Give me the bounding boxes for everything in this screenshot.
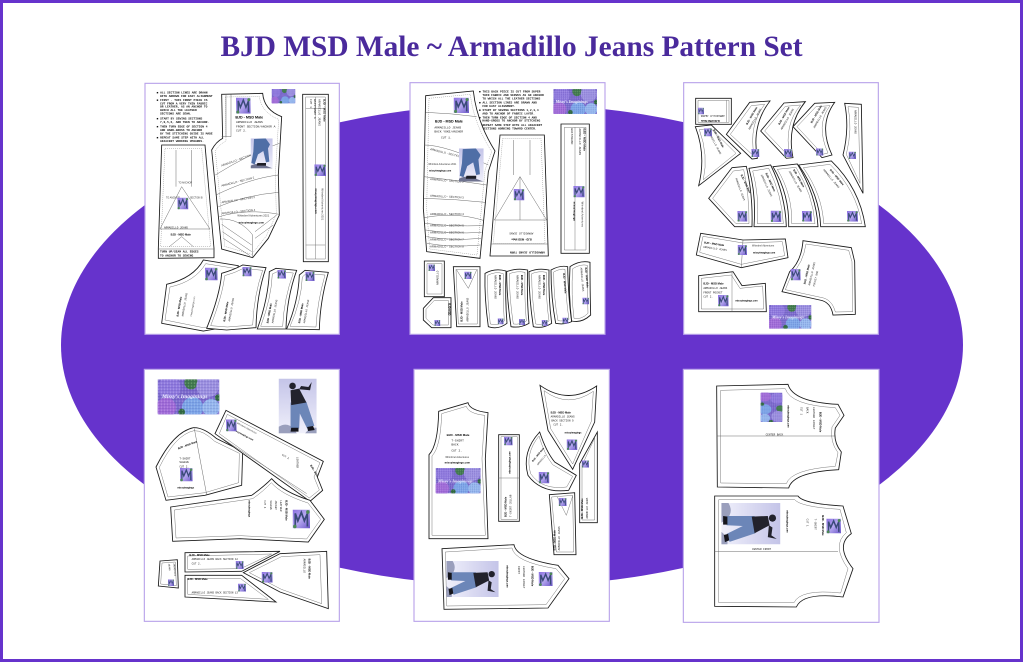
piece: back yoke: ARMADILLO - SECTION 7 <box>430 237 464 241</box>
piece: front leg: SECTION B <box>190 197 203 199</box>
piece: back yoke: ARMADILLO - SECTION 4 <box>430 212 464 216</box>
piece: lower sections row: ARMADILLO JEANS <box>271 299 279 324</box>
piece: t-shirt back <box>429 403 488 539</box>
piece: t-shirt back: BACK <box>451 443 459 446</box>
instruction notes <box>479 91 544 130</box>
pieces: chevron sections lower row: BJD - MSD Male <box>792 168 806 188</box>
panel: jeans front pattern sheet <box>145 83 339 334</box>
piece: back leg: ARMADILLO JEANS <box>509 231 533 234</box>
pieces: chevron sections upper row: ARMADILLO JEANS <box>813 106 828 129</box>
piece: front pocket: FRONT POCKET <box>703 291 723 294</box>
piece: jacket collar strip: CUT 2 <box>281 454 290 460</box>
piece: strip: BJD - MSD Male <box>580 498 584 519</box>
piece: lower sections row: ARMADILLO JEANS <box>228 297 235 322</box>
instruction notes: WHICH ALL THE LEATHER <box>160 109 197 112</box>
piece: jacket back <box>717 384 844 488</box>
piece: back leg: BJD - MSD Male <box>511 237 532 241</box>
instruction notes: 7,8,5,6, AND THEN TO ANCHOR. <box>160 121 209 124</box>
piece: front yoke: ARMADILLO - SECTION 3 <box>221 195 256 204</box>
piece: t-shirt back: BJD - MSD Male <box>447 433 470 437</box>
piece: back yoke: ARMADILLO - SECTION 8 <box>430 244 464 248</box>
piece: lower sections row: BJD - MSD Male <box>265 302 273 324</box>
panel: t-shirt and jacket sleeve sheet <box>144 369 339 621</box>
piece: small rectangle: ARMADILLO JEANS <box>700 114 725 117</box>
instruction notes: HAND-GROSS TO ANCHOR BY STITCHING <box>482 120 540 123</box>
piece: jacket yoke: BJD - MSD Male <box>551 411 571 415</box>
piece: lower sections row: missyimagings.com <box>191 296 196 317</box>
icon: hydrangea tile <box>573 186 585 197</box>
piece: back yoke strip: missyimagings.com <box>753 252 775 254</box>
instruction notes: ■ ALL SECTION LINES ARE DRAWN AND <box>479 102 537 105</box>
pieces: back sections: ARMADILLO JEANS BACK SECTION 13 <box>192 591 238 594</box>
piece: t-shirt back: Whimbrel Adventures <box>445 456 470 459</box>
instruction notes: OR LEATHER, AS AN ANCHOR TO <box>160 106 208 109</box>
instruction notes: FOR EASY ALIGNMENT. <box>482 105 516 108</box>
panel: t-shirt and vest pattern sheet <box>414 369 609 621</box>
logo banner <box>552 86 599 117</box>
piece: front yoke: ARMADILLO - SECTION 2 <box>221 175 255 188</box>
piece: back yoke: BJD - MSD Male <box>435 119 463 123</box>
piece: fly strip: BJD - MSD Male <box>322 99 326 122</box>
piece: t-shirt back: Missy's Imaginings <box>437 478 473 483</box>
piece: small parts row: ARMADILLO JEANS <box>579 267 584 292</box>
instruction notes: ■ REPEAT SAME STEP WITH ALL ADJACENT <box>479 124 542 127</box>
piece: jacket collar strip: BJD - MSD <box>309 464 319 478</box>
piece: back yoke: Whimbrel Adventures 2021 <box>428 163 457 166</box>
piece: jacket back: missyimagings.com <box>786 405 788 428</box>
piece: front leg: TURN UP/SEAM ALL EDGES <box>160 249 199 253</box>
logo banner <box>434 465 482 496</box>
instruction notes: ■ THIS BACK PIECE IS CUT FROM SUPER <box>479 91 541 94</box>
piece: collar <box>499 435 519 521</box>
piece: lower sections row: BJD - MSD Male <box>222 301 230 322</box>
pieces: back sections: ARMADILLO <box>302 559 305 573</box>
instruction notes: SECTIONS ARE SEWN. <box>160 112 192 115</box>
piece: rectangle section: ARMADILLO JEANS <box>558 526 561 550</box>
piece: leather jacket front: missyimagings.com <box>505 565 507 588</box>
piece: pocket bag: BJD - MSD Male <box>802 263 811 285</box>
piece: jacket back: CENTER BACK <box>766 433 784 436</box>
piece: small tag: JEANS <box>167 563 171 571</box>
piece: back leg <box>490 135 548 256</box>
piece: fly strip <box>303 94 328 262</box>
piece: jacket yoke: ARMADILLO JEANS <box>551 416 575 419</box>
pieces: chevron sections upper row: ARMADILLO JEANS <box>854 110 857 134</box>
piece: back yoke: ARMADILLO JEANS <box>434 126 461 129</box>
piece: fly strip: CUT 1 <box>309 99 312 108</box>
logo banner <box>271 87 296 105</box>
piece: strip: ARMADILLO JEANS <box>586 497 589 519</box>
piece: jacket front: BJD - MSD Male <box>821 515 825 536</box>
piece: jacket front: CUT 1 <box>805 519 808 527</box>
piece: jacket sleeve: missyimagings <box>247 500 249 518</box>
logo banner: Missy's Imaginings <box>771 314 804 319</box>
piece: small rectangle: BJD-MSD Male <box>700 119 720 123</box>
pieces: chevron sections lower row: BJD - MSD Male <box>740 174 752 194</box>
instruction notes: AND TO ANCHOR OF FABRIC LAYER. <box>482 112 535 115</box>
piece: t-shirt sleeve: CUT 2. <box>179 465 189 468</box>
piece: back yoke strip <box>696 233 788 268</box>
piece: lower sections row: ARMADILLO JEANS <box>181 292 189 317</box>
piece: small tag <box>158 560 178 588</box>
piece: back leg: ARMADILLO JEANS TURN <box>510 251 545 254</box>
instruction notes: BY THE STITCHING GUIDE IS MADE <box>160 132 213 135</box>
piece: jacket collar strip <box>215 410 323 501</box>
piece: front leg <box>158 145 214 258</box>
piece: jacket yoke <box>540 385 597 469</box>
instruction notes: ■ ALL SECTION LINES ARE DRAWN <box>157 92 208 95</box>
pieces: back sections <box>185 551 328 609</box>
photo: jeans figure <box>251 138 273 168</box>
instruction notes: ■ THEN TURN EDGE OF SECTION 4 <box>157 126 208 129</box>
piece: back yoke strip: BJD - MSD Male <box>704 240 725 247</box>
piece: jacket back: BACK <box>805 407 808 414</box>
icon: hydrangea tile <box>236 98 251 114</box>
pieces: back sections: BJD - MSD Male <box>189 553 210 557</box>
piece: t-shirt sleeve: BJD - MSD Male <box>177 439 198 450</box>
piece: jacket front <box>715 496 853 607</box>
piece: small tag: ARMADILLO <box>172 563 176 577</box>
piece: front leg: ARMADILLO JEANS <box>164 226 188 229</box>
piece: front pocket: missyimagings.com <box>735 301 758 303</box>
piece: small parts row: BJD - MSD Male <box>562 273 568 294</box>
piece: waistband strip: missyimagings <box>572 202 576 221</box>
pieces: back sections: CUT 2. <box>192 562 201 565</box>
pieces: chevron sections upper row: ARMADILLO JEANS <box>708 132 722 155</box>
piece: front pocket: CUT 2. <box>703 296 713 299</box>
photo: figure rotated <box>721 503 780 544</box>
icon: hydrangea tile <box>314 164 326 176</box>
piece: front leg: BJD - MSD Male <box>171 233 191 237</box>
piece: lower sections row: BJD - MSD Male <box>175 296 183 317</box>
panel: jeans back pattern sheet <box>410 83 605 334</box>
icon: hydrangea tile <box>454 98 469 113</box>
piece: rectangle section: BJD - MSD Male <box>552 530 556 550</box>
instruction notes: ■ THEN TURN EDGE OF SECTION 4 AND <box>479 116 537 119</box>
piece: jacket sleeve: CUT 4 <box>263 500 266 509</box>
piece: front yoke: ARMADILLO - SECTION 4 <box>221 208 256 215</box>
piece: waistband strip <box>561 124 589 253</box>
piece: back yoke <box>423 91 495 258</box>
icon: hydrangea tile <box>514 189 524 200</box>
piece: half-round section: ARMADILLO <box>536 454 547 466</box>
piece: back yoke: BACK YOKE/ANCHOR <box>434 129 463 133</box>
piece: fly strip: ARMADILLO JEANS <box>318 99 321 126</box>
piece: front leg: TO ANCHOR <box>166 196 180 199</box>
piece: jacket sleeve <box>171 479 324 542</box>
piece: t-shirt sleeve: SLEEVE <box>179 461 189 464</box>
logo banner <box>156 375 222 418</box>
instruction notes: CUT FROM A VERY THIN FABRIC <box>160 102 208 105</box>
piece: back yoke: ARMADILLO - SECTION 2 <box>430 177 464 184</box>
piece: front leg: TO ANCHOR <box>178 181 192 184</box>
piece: small parts row: BJD-MSD <box>447 303 451 316</box>
title: BJD MSD Male ~ Armadillo Jeans Pattern Set <box>220 30 803 63</box>
piece: strip <box>580 432 597 523</box>
piece: small parts row: ARMADILLO JEANS <box>493 275 496 299</box>
piece: rectangle section <box>549 493 576 555</box>
instruction notes: ■ FIRST - THIS FRONT PIECE IS <box>157 99 208 102</box>
piece: jacket front: missyimagings.com <box>785 510 787 533</box>
instruction notes: ■ REPEAT SAME STEP WITH ALL <box>157 137 204 140</box>
photo: jeans figure <box>459 148 484 182</box>
instruction notes: WITH ARROWS FOR EASY ALIGNMENT <box>160 95 213 98</box>
piece: front yoke <box>212 93 282 258</box>
logo banner rotated <box>758 392 785 423</box>
instruction notes: AND HAND-GROSS TO ANCHOR <box>160 129 202 132</box>
piece: small parts row: ARMADILLO JEANS <box>537 275 540 299</box>
piece: front yoke: FRONT SECTION/ANCHOR A <box>236 124 276 128</box>
piece: pocket bag: POCKET BAG <box>813 270 819 287</box>
piece: half-round section: BJD - MSD Male <box>532 447 546 463</box>
piece: back yoke: ARMADILLO - SECTION 1 <box>430 147 464 159</box>
piece: jacket front: CENTER FRONT <box>752 548 772 551</box>
piece: small rectangle <box>696 98 731 124</box>
instruction notes <box>157 92 213 143</box>
pieces: chevron sections lower row: ARMADILLO JEANS <box>734 178 746 202</box>
piece: jacket collar strip: missyimagings.com <box>233 429 253 442</box>
pieces: chevron sections upper row: ARMADILLO JEANS <box>748 108 763 130</box>
instruction notes: ADJACENT WORKING UPWARDS. <box>160 140 204 143</box>
piece: small parts row: BJD - MSD Male <box>459 301 463 322</box>
piece: front pocket <box>699 272 766 312</box>
piece: back yoke: ARMADILLO - SECTION 3 <box>430 194 464 199</box>
piece: fly strip: Whimbrel Adventures 2021 <box>321 188 325 221</box>
piece: waistband strip: BJD - MSD Male <box>582 128 586 151</box>
piece: collar: BJD - MSD Male <box>503 496 507 517</box>
piece: t-shirt sleeve: T-SHIRT <box>179 457 191 460</box>
piece: jacket back: LEATHER JACKET <box>812 407 815 430</box>
piece: small parts row: BJD - MSD Male <box>520 275 524 296</box>
piece: small parts row: ARMADILLO <box>436 270 439 285</box>
piece: leather jacket front: BJD - MSD Male <box>530 566 534 587</box>
pieces: chevron sections upper row: BJD - MSD Male <box>745 106 759 125</box>
piece: t-shirt back: missyimagings.com <box>445 460 471 464</box>
piece: fly strip: missyimagings.com <box>314 188 318 214</box>
piece: back yoke: CUT 1. <box>441 136 452 139</box>
logo banner: Missy's Imaginings <box>555 99 588 104</box>
instruction notes: TO WHICH ALL THE LEATHER SECTIONS <box>482 97 540 100</box>
piece: jacket collar strip: Whimbrel Adventures <box>236 422 258 435</box>
pieces: chevron sections lower row: BJD - MSD Male <box>764 172 777 193</box>
pieces: chevron sections upper row: BJD - MSD Male <box>712 129 725 149</box>
piece: jacket back: CUT 1 <box>800 407 803 415</box>
pieces: chevron sections lower row <box>709 161 865 227</box>
piece: front yoke: CUT 2. <box>236 130 247 133</box>
piece: t-shirt back: T-SHIRT <box>451 439 464 442</box>
pieces: chevron sections upper row: BJD - MSD Male <box>809 104 823 124</box>
pieces: chevron sections lower row: ARMADILLO JEANS <box>760 174 773 197</box>
piece: small parts row: BJD - MSD Male <box>542 275 546 296</box>
piece: pocket bag: ARMADILLO JEANS <box>808 262 816 286</box>
panel: jacket body pattern sheet <box>683 369 879 622</box>
piece: half-round section <box>526 432 576 491</box>
piece: small parts row <box>423 261 591 328</box>
piece: back yoke: missyimagings.com <box>429 171 451 173</box>
piece: back yoke strip: ARMADILLO JEANS <box>703 246 727 252</box>
piece: jacket yoke: missyimagings <box>565 432 582 434</box>
piece: jacket yoke: BACK SECTION 9 <box>551 419 574 422</box>
piece: back yoke: ARMADILLO - SECTION 6 <box>430 231 464 235</box>
pieces: back sections: BJD - MSD Male <box>187 577 208 581</box>
logo banner <box>768 302 813 331</box>
piece: front pocket: ARMADILLO JEANS <box>703 287 728 290</box>
piece: jacket sleeve: JACKET <box>274 500 277 510</box>
piece: t-shirt back: CUT 2. <box>451 449 462 452</box>
pieces: back sections: ARMADILLO JEANS BACK SECTION 12 <box>192 558 238 561</box>
photo: figure rotated <box>446 561 499 597</box>
instruction notes: ■ START BY SEWING SECTIONS 1,2,3,4 <box>479 109 539 112</box>
piece: collar: T-SHIRT COLLAR <box>509 494 512 517</box>
pieces: chevron sections lower row: ARMADILLO JEANS <box>788 171 803 193</box>
pieces: chevron sections upper row: ARMADILLO JEANS <box>780 108 795 130</box>
piece: lower sections row <box>162 260 328 331</box>
piece: small parts row: ARMADILLO JEANS <box>515 275 518 299</box>
piece: front yoke: BJD - MSD Male <box>235 115 263 119</box>
instruction notes: ■ START BY SEWING SECTIONS <box>157 118 203 121</box>
piece: fly strip: WAISTBAND A <box>313 99 316 119</box>
piece: small parts row: BJD - MSD Male <box>584 267 590 288</box>
piece: leather jacket front: LEATHER JACKET <box>522 566 525 589</box>
icon: hydrangea tile <box>177 198 188 209</box>
piece: lower sections row: ARMADILLO JEANS <box>303 299 310 324</box>
piece: front yoke: Whimbrel Adventures 2021 <box>237 214 270 218</box>
piece: jacket front: T-SHIRT <box>814 519 817 530</box>
piece: back yoke: ARMADILLO - SECTION 5 <box>430 224 464 228</box>
piece: leather jacket front: FRONT <box>517 566 520 574</box>
piece: front pocket: BJD - MSD Male <box>703 281 724 285</box>
piece: jacket yoke: CUT 2. <box>553 423 563 426</box>
piece: front leg: TO ANCHOR TO SEWING <box>160 254 194 257</box>
piece: waistband strip: Whimbrel Adventures <box>581 202 585 228</box>
piece: front yoke: missyimagings.com <box>239 220 265 224</box>
piece: waistband strip: WAISTBAND <box>570 128 573 145</box>
panel: armadillo sections sheet <box>684 83 878 334</box>
piece: jacket sleeve: LEATHER <box>279 500 282 512</box>
piece: leather jacket front <box>442 545 569 609</box>
logo banner: Missy's Imaginings <box>161 394 208 400</box>
pieces: chevron sections upper row <box>695 101 863 193</box>
piece: waistband strip: ARMADILLO JEANS <box>578 128 581 155</box>
purple oval background <box>61 104 963 586</box>
pieces: chevron sections upper row: BJD - MSD Male <box>777 106 791 125</box>
piece: pocket bag <box>782 241 855 315</box>
photo: standing figure <box>279 379 317 433</box>
pieces: back sections: BJD - MSD Male <box>307 559 311 579</box>
instruction notes: THIN FABRIC AND SERVES AS AN ANCHOR <box>482 94 544 97</box>
piece: front yoke: ARMADILLO - SECTION 1 <box>221 152 254 168</box>
pieces: chevron sections lower row: BJD - MSD Male <box>829 168 845 187</box>
pieces: chevron sections lower row: ARMADILLO JEANS <box>822 169 840 189</box>
piece: t-shirt sleeve <box>156 428 243 500</box>
piece: collar: missyimagings.com <box>510 451 512 474</box>
piece: t-shirt sleeve: missyimagings <box>177 488 195 490</box>
piece: jacket collar strip: LEATHER <box>296 457 299 469</box>
piece: jacket sleeve: BJD - MSD Male <box>284 500 288 521</box>
piece: small parts row: BJD - MSD Male <box>498 275 502 296</box>
piece: jacket sleeve: SLEEVE <box>269 500 272 510</box>
piece: lower sections row: BJD - MSD Male <box>297 302 305 324</box>
piece: jacket back: BJD - MSD Male <box>819 412 823 433</box>
piece: small parts row: ARMADILLO JEANS <box>466 297 469 322</box>
instruction notes: SECTIONS WORKING TOWARD CENTER. <box>482 127 537 130</box>
piece: front yoke: ARMADILLO JEANS <box>236 121 263 124</box>
piece: back yoke strip: Whimbrel Adventures <box>752 245 775 248</box>
